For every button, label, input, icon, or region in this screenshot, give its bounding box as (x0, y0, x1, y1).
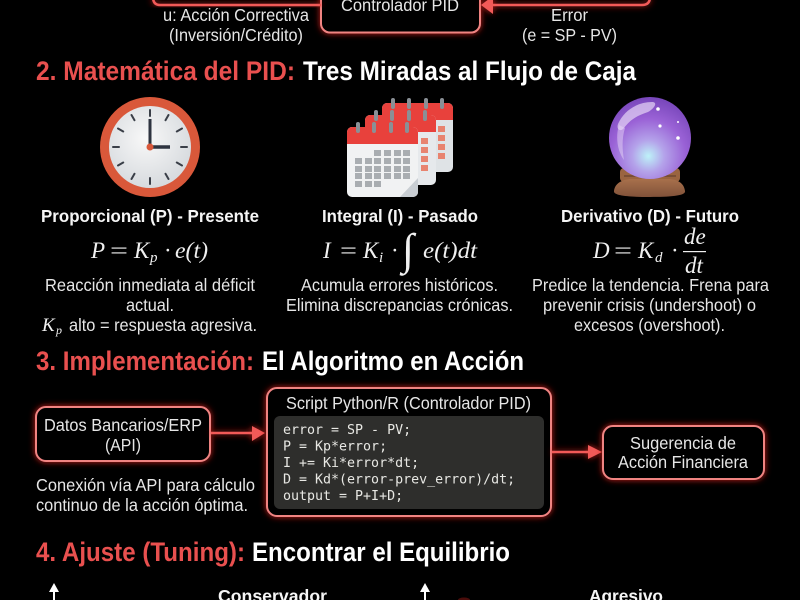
text: conexion: continuo de la acción óptima. (36, 495, 248, 515)
description I: Acumula errores históricos. (301, 275, 498, 295)
heading 2: 2. Matemática del PID: (36, 56, 295, 86)
heading: proporcional: Proporcional (P) - Presente (41, 206, 259, 226)
code block: output = P+I+D; (283, 489, 403, 504)
description D (532, 275, 769, 335)
error label (522, 5, 617, 45)
formula I: ∫ (399, 225, 417, 276)
code block: error = SP - PV; (283, 423, 411, 438)
column: proporcional (41, 97, 259, 337)
formula D: D (592, 238, 610, 263)
formula P: K (133, 238, 151, 263)
description P: alto = respuesta agresiva. (69, 315, 257, 335)
description D: prevenir crisis (undershoot) o (543, 295, 756, 315)
chart axis: conservador (49, 583, 59, 600)
code block: P = Kp*error; (283, 440, 387, 454)
formula P (90, 238, 208, 266)
description P: actual. (126, 295, 174, 315)
arrow: datos to script (211, 426, 265, 441)
text: conexion (36, 475, 255, 515)
icon: crystal ball (609, 97, 691, 197)
panel: datos bancarios: Datos Bancarios/ERP (44, 415, 202, 435)
formula D: d (655, 250, 663, 266)
text: conexion: Conexión vía API para cálculo (36, 475, 255, 495)
description P: Reacción inmediata al déficit (45, 275, 255, 295)
heading 2 (36, 56, 637, 86)
description I (286, 275, 513, 315)
feedback loop diagram (top) (153, 0, 650, 45)
formula D (592, 224, 706, 278)
formula D: · (671, 238, 679, 263)
panel: script: Script Python/R (Controlador PID) (286, 393, 531, 413)
heading 3: El Algoritmo en Acción (262, 346, 524, 376)
arrow: script to suggestion (552, 445, 602, 459)
formula P: P (90, 238, 105, 263)
formula I: e(t)dt (423, 238, 478, 263)
formula I: · (391, 238, 399, 263)
panel: sugerencia (603, 426, 764, 479)
error label: (e = SP - PV) (522, 25, 617, 45)
formula P: p (149, 250, 158, 266)
heading 4: Encontrar el Equilibrio (252, 537, 510, 567)
formula D: K (637, 238, 655, 263)
formula I (322, 225, 478, 276)
heading: derivativo: Derivativo (D) - Futuro (561, 206, 739, 226)
description P: K (41, 315, 56, 336)
heading 4: 4. Ajuste (Tuning): (36, 537, 245, 567)
code block: D = Kd*(error-prev_error)/dt; (283, 472, 515, 488)
column: derivativo (532, 97, 769, 335)
formula D: = (614, 238, 632, 263)
formula I: K (362, 238, 380, 263)
code block: I += Ki*error*dt; (283, 456, 419, 471)
code block (274, 416, 544, 509)
chart curve peak (458, 598, 470, 600)
panel: sugerencia: Acción Financiera (618, 452, 748, 472)
panel: script (267, 388, 551, 516)
panel: datos bancarios (36, 407, 210, 461)
description I: Elimina discrepancias crónicas. (286, 295, 513, 315)
right error arrow (481, 0, 650, 14)
chart axis: agresivo (420, 583, 430, 600)
heading 2: Tres Miradas al Flujo de Caja (303, 56, 637, 86)
formula I: = (340, 238, 357, 263)
formula I: i (379, 250, 383, 266)
heading 3 (36, 346, 524, 376)
heading 4 (36, 537, 510, 567)
formula D: dt (685, 253, 704, 278)
description D: Predice la tendencia. Frena para (532, 275, 769, 295)
icon: calendars (347, 98, 453, 197)
formula D: de (684, 224, 706, 249)
heading: integral: Integral (I) - Pasado (322, 206, 478, 226)
corrective action label: u: Acción Correctiva (163, 5, 309, 25)
panel: datos bancarios: (API) (105, 435, 141, 455)
formula P: · (164, 238, 172, 263)
error label: Error (551, 5, 588, 25)
controller box (321, 0, 480, 32)
description P: p (55, 323, 62, 337)
formula P: e(t) (175, 238, 208, 263)
column: integral (286, 98, 513, 315)
description D: excesos (overshoot). (574, 315, 725, 335)
formula I: I (322, 238, 332, 263)
description P (41, 275, 257, 337)
corrective action label (163, 5, 309, 45)
corrective action label: (Inversión/Crédito) (169, 25, 303, 45)
left output line (153, 0, 321, 5)
formula P: = (110, 238, 128, 263)
icon: clock (100, 97, 200, 197)
heading 3: 3. Implementación: (36, 346, 254, 376)
panel: sugerencia: Sugerencia de (630, 433, 736, 453)
